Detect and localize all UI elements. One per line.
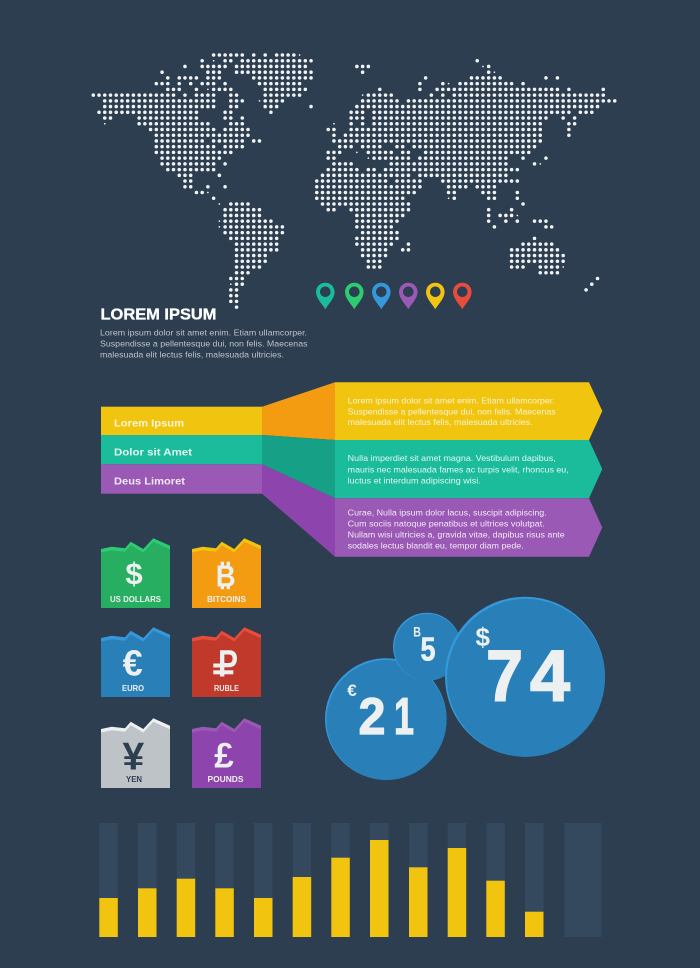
card: US dollars bbox=[101, 538, 170, 608]
card: pounds bbox=[192, 718, 261, 788]
arrow: purple: Cum sociis natoque penatibus et ultrices volutpat. bbox=[348, 519, 545, 529]
connector folds bbox=[262, 382, 335, 557]
chart tracks bbox=[99, 823, 602, 937]
bubble: dollar 74 bbox=[445, 597, 605, 757]
bubble: dollar 74: $ bbox=[476, 622, 490, 652]
card: euro: EURO bbox=[122, 684, 144, 693]
arrow: purple: sodales lectus blandit eu, tempor diam pede. bbox=[348, 540, 524, 550]
arrow: yellow: Lorem ipsum dolor sit amet enim. Etiam ullamcorper. bbox=[348, 395, 555, 405]
arrow: yellow: Suspendisse a pellentesque dui, non felis. Maecenas bbox=[348, 406, 556, 416]
arrow: teal: luctus et interdum adipiscing wisi. bbox=[348, 475, 481, 485]
card: US dollars: US DOLLARS bbox=[110, 595, 162, 604]
card: euro: € bbox=[123, 642, 143, 684]
card: bitcoins: B bbox=[216, 559, 236, 594]
bubble: euro 21: € bbox=[347, 681, 357, 700]
arrow: teal: Nulla imperdiet sit amet magna. Vestibulum dapibus, bbox=[348, 453, 556, 463]
heading: LOREM IPSUM bbox=[100, 306, 216, 324]
arrow: purple: Nullam wisi ultricies a, gravida vitae, dapibus risus ante bbox=[348, 530, 565, 540]
arrow: teal: mauris nec malesuada fames ac turpis velit, rhoncus eu, bbox=[348, 464, 569, 474]
pin: purple bbox=[399, 283, 418, 309]
bubble: euro 21 bbox=[325, 658, 447, 780]
pin: blue bbox=[372, 283, 391, 309]
left tabs: Deus Limoret bbox=[114, 476, 186, 488]
pin: red bbox=[453, 283, 472, 309]
card: euro bbox=[101, 627, 170, 697]
arrow: purple: Curae, Nulla ipsum dolor lacus, suscipit adipiscing. bbox=[348, 508, 547, 518]
card: ruble: P bbox=[218, 644, 238, 686]
intro text block bbox=[100, 328, 308, 360]
arrow: teal bbox=[335, 440, 602, 498]
arrow: purple bbox=[335, 498, 602, 557]
chart values bbox=[99, 840, 544, 937]
arrow: yellow: malesuada elit lectus felis, malesuada ultricies. bbox=[348, 417, 533, 427]
bubble: bitcoin 5: 5 bbox=[420, 630, 436, 668]
arrow: yellow bbox=[335, 382, 602, 440]
card: yen bbox=[101, 718, 170, 788]
bubble: bitcoin 5: B bbox=[413, 624, 421, 640]
card: bitcoins: BITCOINS bbox=[207, 595, 247, 604]
panel: ribbon diagram bbox=[101, 382, 602, 557]
intro text block: Lorem ipsum dolor sit amet enim. Etiam ullamcorper. bbox=[100, 328, 307, 338]
bubble: euro 21: 2 bbox=[358, 688, 386, 746]
intro text block: Suspendisse a pellentesque dui, non felis. Maecenas bbox=[100, 338, 308, 348]
card: pounds: POUNDS bbox=[208, 775, 244, 784]
bubble: bitcoin 5 bbox=[393, 613, 461, 681]
card: yen: YEN bbox=[126, 775, 142, 784]
card: yen: ¥ bbox=[122, 735, 144, 778]
dotted world map bbox=[93, 55, 615, 307]
card: ruble: RUBLE bbox=[214, 684, 240, 693]
pin: teal bbox=[316, 283, 335, 309]
left tabs bbox=[101, 407, 262, 494]
pin: yellow bbox=[426, 283, 445, 309]
bar chart bbox=[99, 823, 602, 937]
bubble: dollar 74: 4 bbox=[530, 636, 570, 716]
pin: green bbox=[345, 283, 364, 309]
map location pins bbox=[316, 283, 472, 309]
left tabs: Dolor sit Amet bbox=[114, 446, 193, 458]
card: ruble bbox=[192, 627, 261, 697]
bubble: euro 21: 1 bbox=[394, 688, 414, 746]
card: bitcoins bbox=[192, 538, 261, 608]
card: pounds: £ bbox=[214, 737, 234, 776]
panel: currency cards bbox=[101, 538, 261, 788]
left tabs: Lorem Ipsum bbox=[114, 418, 184, 430]
card: US dollars: $ bbox=[125, 556, 143, 591]
panel: currency bubbles bbox=[325, 597, 605, 780]
bubble: dollar 74: 7 bbox=[486, 636, 523, 716]
intro text block: malesuada elit lectus felis, malesuada ultricies. bbox=[100, 350, 284, 360]
